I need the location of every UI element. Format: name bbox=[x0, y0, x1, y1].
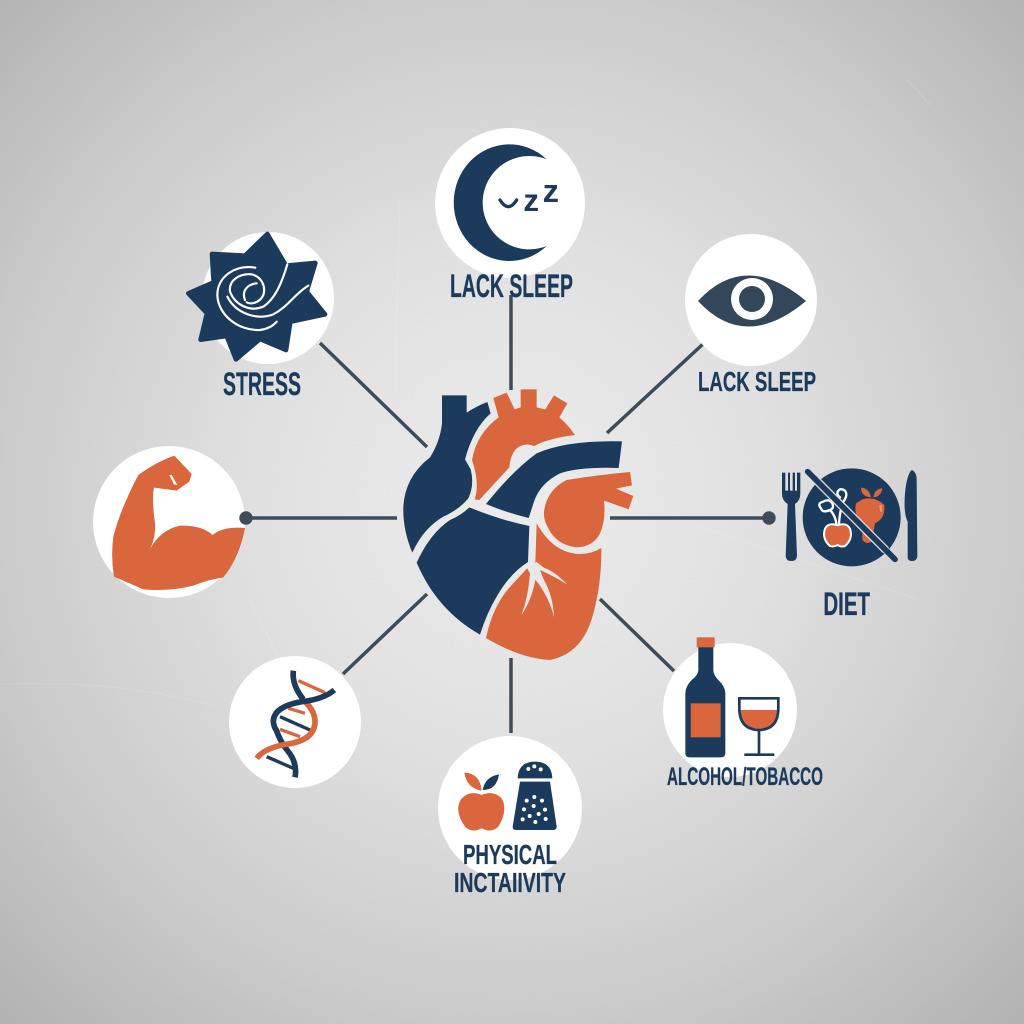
panel: muscle bbox=[93, 446, 245, 598]
icon: dna helix bbox=[257, 671, 334, 777]
icon: fork bbox=[782, 473, 800, 561]
label: stress: STRESS bbox=[223, 366, 301, 402]
panel: stress bbox=[188, 232, 334, 402]
heart: left ventricle bbox=[417, 507, 529, 635]
heart: left atrium bbox=[544, 472, 633, 547]
central heart bbox=[403, 389, 633, 660]
circle: eye background bbox=[685, 234, 817, 366]
heart: right ventricle with vessels bbox=[486, 523, 601, 660]
circle: physical inactivity background bbox=[438, 736, 582, 880]
icon: moon with zzz: z bbox=[523, 183, 539, 218]
icon: knife bbox=[905, 470, 917, 561]
circle: muscle background bbox=[93, 446, 245, 598]
icon: bottle and glass bbox=[685, 637, 778, 757]
panel: genetics bbox=[229, 656, 361, 788]
circle: stress background bbox=[202, 232, 334, 364]
connector lines bbox=[245, 295, 768, 733]
connector end dots bbox=[239, 511, 776, 525]
panel: physical inactivity bbox=[438, 736, 582, 898]
panel: alcohol and tobacco bbox=[663, 637, 823, 791]
circle: dna background bbox=[229, 656, 361, 788]
icon: carrot bbox=[855, 488, 884, 543]
icon: eye bbox=[698, 276, 806, 326]
icon: plate bbox=[803, 468, 901, 566]
heart: superior vena cava and right atrium bbox=[403, 395, 491, 553]
icon: moon with zzz bbox=[454, 144, 559, 261]
label: lack sleep: LACK SLEEP bbox=[450, 268, 573, 304]
icon: apple and shaker bbox=[458, 762, 557, 830]
label: lack sleep: LACK SLEEP bbox=[698, 366, 816, 397]
panel: lack sleep (moon) bbox=[435, 128, 585, 304]
icon: slash bbox=[818, 482, 885, 549]
panel: diet bbox=[782, 468, 917, 622]
label: diet: DIET bbox=[823, 586, 870, 622]
label: physical inactivity: PHYSICAL bbox=[463, 839, 557, 870]
label: physical inactivity bbox=[454, 839, 566, 898]
heart: aortic arch bbox=[472, 389, 575, 500]
icon: starburst swirl bbox=[188, 234, 325, 359]
label: alcohol/tobacco: ALCOHOL/TOBACCO bbox=[667, 763, 823, 791]
circle: alcohol background bbox=[663, 643, 797, 777]
heart: pulmonary artery bbox=[486, 441, 622, 518]
panel: lack sleep (eye) bbox=[685, 234, 817, 397]
icon: vegetable outline bbox=[819, 489, 846, 523]
circle: moon background bbox=[435, 128, 585, 278]
icon: moon with zzz: z bbox=[543, 172, 559, 209]
icon: flexed arm bbox=[112, 456, 245, 590]
icon: apple bbox=[824, 524, 851, 546]
label: physical inactivity: INCTAIIVITY bbox=[454, 867, 566, 898]
